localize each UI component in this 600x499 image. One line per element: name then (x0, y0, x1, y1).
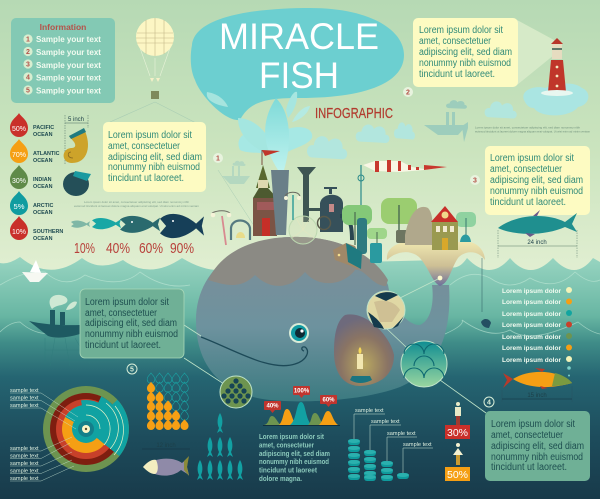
tail detail lens (367, 291, 405, 329)
centre paragraph: nonummy nibh euismod (259, 457, 329, 466)
donut chart labels: sample text (10, 396, 39, 402)
small whale house (333, 243, 362, 269)
information panel: 2 (26, 49, 30, 56)
windsock (358, 160, 447, 250)
horn and shell icons with 5 inch ruler (63, 115, 91, 196)
ocean percent drops: OCEAN (33, 210, 53, 216)
whale (196, 237, 449, 401)
text box 2 with lighthouse beam: Lorem ipsum dolor sit (419, 25, 503, 36)
text box 1: amet, consectetuer (108, 141, 181, 152)
text box 3 (485, 146, 590, 215)
people stats: 30% (447, 427, 468, 439)
centre paragraph: tincidunt ut laoreet (259, 466, 317, 474)
information panel: Sample your text (36, 34, 101, 44)
street lamp by factory (284, 192, 301, 220)
ocean percent drops: 10% (12, 227, 26, 236)
information panel: Sample your text (36, 72, 101, 82)
people stats (445, 402, 470, 481)
text box 3: Lorem ipsum dolor sit (490, 153, 574, 164)
legend (502, 287, 572, 376)
number markers: 1 (216, 156, 220, 162)
people stats: 50% (447, 469, 468, 481)
ocean percent drops: 30% (12, 176, 26, 185)
speech bubble with title: FISH (259, 55, 339, 96)
text box 1 (103, 122, 260, 235)
marker 5: 5 (130, 366, 134, 374)
text box 5: Lorem ipsum dolor sit (85, 297, 169, 308)
tiny caption (475, 126, 591, 134)
fish growth row (71, 214, 204, 238)
percent scale: 90% (170, 240, 194, 257)
caption above fish: euismod tincidunt ut laoreet dolore magna aliquam erat volutpat. Ut wisi enim ad minim veniam (74, 204, 200, 208)
donut chart labels: sample text (10, 388, 39, 394)
peak chart: 60% (322, 398, 335, 404)
paper boat (22, 260, 48, 282)
legend: Lorem ipsum dolor (502, 345, 561, 352)
coin stack chart (348, 408, 433, 481)
information panel: Information (40, 22, 86, 32)
text box 1: adipiscing elit, sed diam (108, 152, 202, 163)
text box 2 with lighthouse beam: amet, consectetuer (419, 36, 492, 47)
information panel: Sample your text (36, 47, 101, 57)
sky background (0, 0, 600, 300)
caption above fish: Lorem ipsum dolor sit amet, consectetuer adipiscing elit, sed diam nonummy nibh (84, 200, 189, 204)
information panel: 5 (26, 88, 30, 94)
text box 2 with lighthouse beam: nonummy nibh euismod (419, 58, 511, 69)
tiny caption: euismod tincidunt ut laoreet dolore magna aliquam erat volutpat. Ut wisi enim ad minim veniam (475, 130, 591, 134)
legend: Lorem ipsum dolor (502, 334, 561, 341)
number markers: 3 (473, 178, 477, 184)
information panel: 1 (26, 36, 30, 44)
percent scale: 60% (139, 240, 163, 257)
text box 3: adipiscing elit, sed diam (490, 175, 583, 186)
percent scale: 40% (106, 240, 130, 257)
subtitle: INFOGRAPHIC (315, 106, 393, 122)
ghost ship (424, 100, 468, 142)
number markers (213, 87, 480, 185)
whale house and tower (253, 150, 289, 236)
steamship with net (29, 295, 115, 366)
trees and posts (342, 198, 476, 263)
centre paragraph: adipiscing elit, sed diam (259, 449, 330, 458)
eye (289, 323, 309, 343)
text box 1: Lorem ipsum dolor sit (108, 130, 192, 141)
donut chart (43, 386, 129, 472)
purple fish with 12 inch ruler: 12 inch (156, 443, 176, 449)
text box 3: amet, consectetuer (490, 164, 563, 175)
peak chart (263, 386, 340, 426)
mouth (201, 337, 308, 366)
donut chart labels: sample text (10, 461, 39, 467)
information panel: 3 (26, 62, 30, 68)
whale back (208, 237, 388, 286)
number markers: 2 (406, 90, 410, 96)
teal fish pyramid (197, 413, 243, 480)
ocean percent drops: INDIAN (33, 177, 52, 183)
donut chart labels: sample text (10, 403, 39, 409)
legend: Lorem ipsum dolor (502, 322, 561, 329)
information panel: Sample your text (36, 60, 101, 70)
text box 4: adipiscing elit, sed diam (491, 441, 584, 452)
text box 5: tincidunt ut laoreet. (85, 340, 161, 351)
24 inch fish with ruler: 24 inch (527, 240, 547, 246)
24 inch fish with ruler (498, 210, 577, 258)
ocean percent drops: OCEAN (33, 184, 53, 190)
sea (0, 257, 600, 499)
ocean percent drops: OCEAN (33, 132, 53, 138)
ocean percent drops (10, 113, 63, 242)
ocean percent drops: ARCTIC (33, 203, 53, 209)
ocean percent drops: SOUTHERN (33, 229, 63, 235)
speech bubble with title: MIRACLE (219, 16, 379, 57)
peak chart: 100% (294, 388, 310, 394)
legend: Lorem ipsum dolor (502, 288, 561, 295)
faint ghost ship left (222, 161, 250, 184)
text box 3: tincidunt ut laoreet. (490, 197, 566, 208)
donut chart labels: sample text (10, 446, 39, 452)
text box 2 with lighthouse beam: adipiscing elit, sed diam (419, 47, 512, 58)
scales lens (401, 341, 447, 387)
donut chart labels: sample text (10, 454, 39, 460)
legend: Lorem ipsum dolor (502, 299, 561, 306)
tail fluke (387, 241, 485, 286)
dots pyramid lens (220, 376, 252, 408)
text box 2 with lighthouse beam: tincidunt ut laoreet. (419, 69, 495, 80)
marker 4: 4 (487, 400, 491, 406)
coin stack chart: sample text (371, 419, 400, 425)
text box 1: tincidunt ut laoreet. (108, 173, 184, 184)
donut chart labels (10, 388, 78, 482)
fishing line with fish (481, 258, 491, 328)
speech bubble with title (191, 8, 404, 120)
information panel: 4 (26, 74, 30, 82)
text box 1: nonummy nibh euismod (108, 162, 200, 173)
legend: Lorem ipsum dolor (502, 357, 561, 364)
factory pipes and boiler (289, 167, 352, 244)
orange fish with 15 inch ruler: 15 inch (527, 393, 547, 399)
coin stack chart: sample text (403, 442, 432, 448)
text box 5 (80, 289, 184, 358)
ocean percent drops: 5% (14, 202, 25, 211)
text box 4 (485, 411, 590, 481)
text box 2 with lighthouse beam (413, 18, 554, 87)
caption above fish (74, 200, 200, 208)
tiny caption: Lorem ipsum dolor sit amet, consectetuer adipiscing elit, sed diam nonummy nibh (475, 126, 580, 130)
ocean percent drops: 50% (12, 124, 26, 133)
text box 4: Lorem ipsum dolor sit (491, 419, 575, 430)
percent scale (74, 240, 194, 257)
marker 4 (484, 397, 494, 407)
yellow house on tail (431, 206, 458, 250)
magnifier connector lines (184, 278, 486, 413)
horn and shell icons with 5 inch ruler: 5 inch (68, 117, 84, 123)
donut chart labels: sample text (10, 468, 39, 474)
coin stack chart: sample text (387, 431, 416, 437)
ocean percent drops: ATLANTIC (33, 151, 60, 157)
marker 5 (127, 364, 137, 374)
orange fish with 15 inch ruler (502, 368, 572, 402)
text box 5: amet, consectetuer (85, 308, 158, 319)
donut chart labels: sample text (10, 476, 39, 482)
information panel: Sample your text (36, 86, 101, 96)
centre paragraph (259, 432, 330, 483)
drop grid (147, 373, 189, 430)
lamp and bell (211, 211, 250, 245)
purple fish with 12 inch ruler (142, 443, 190, 476)
centre paragraph: amet, consectetuer (259, 440, 314, 450)
text box 4: amet, consectetuer (491, 430, 564, 441)
ocean percent drops: OCEAN (33, 158, 53, 164)
text box 4: nonummy nibh euismod (491, 452, 583, 463)
legend: Lorem ipsum dolor (502, 311, 561, 318)
ocean percent drops: PACIFIC (33, 125, 54, 131)
text box 3: nonummy nibh euismod (490, 186, 583, 197)
percent scale: 10% (74, 240, 95, 257)
wave lines (0, 272, 600, 336)
centre paragraph: Lorem ipsum dolor sit (259, 432, 324, 441)
peak chart: 40% (266, 404, 279, 410)
text box 4: tincidunt ut laoreet. (491, 462, 567, 473)
water spout (207, 92, 312, 170)
clouds (307, 101, 517, 159)
ocean percent drops: 70% (12, 150, 26, 159)
ocean percent drops: OCEAN (33, 236, 53, 242)
centre paragraph: dolore magna. (259, 474, 302, 483)
coin stack chart: sample text (355, 408, 384, 414)
lighthouse on cloud (523, 38, 588, 115)
lantern chamber with candle (334, 314, 394, 386)
text box 5: adipiscing elit, sed diam (85, 318, 177, 329)
information panel (11, 18, 115, 103)
text box 5: nonummy nibh euismod (85, 329, 178, 340)
hot air balloon (110, 18, 200, 125)
